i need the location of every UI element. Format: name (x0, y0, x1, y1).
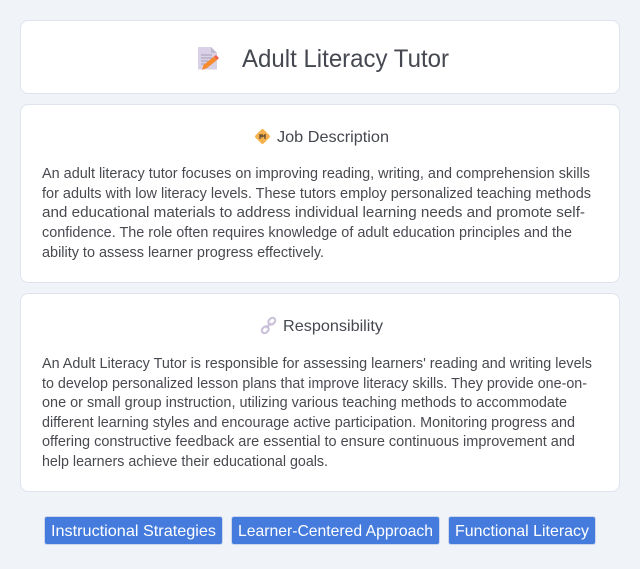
tag: learner-centered approach: Learner-Centered Approach (238, 523, 433, 540)
heading: responsibility: Responsibility (283, 318, 383, 335)
icon: document with pencil (198, 47, 219, 70)
panel: responsibility (20, 293, 620, 492)
heading: job description: Job Description (277, 129, 389, 146)
panel: job description (20, 104, 620, 283)
text: job description body: confidence. The role often requires knowledge of adult education principles and the (42, 225, 572, 241)
text: responsibility body: help learners achieve their educational goals. (42, 454, 328, 470)
text: responsibility body: different learning styles and encourage active participation. Monitoring progress and (42, 415, 575, 431)
text: responsibility body: offering constructive feedback are essential to ensure continuous improvement and (42, 434, 575, 450)
title: Adult Literacy Tutor (242, 45, 449, 73)
text: responsibility body: one or small group instruction, utilizing various teaching methods to accommodate (42, 395, 567, 411)
tag: functional literacy: Functional Literacy (455, 523, 589, 540)
icon: diamond sign (255, 129, 270, 144)
tag: functional literacy (448, 516, 596, 545)
tag: instructional strategies (44, 516, 223, 545)
text: job description body: and educational materials to address individual learning needs and promote self- (42, 205, 585, 221)
text: job description body: An adult literacy tutor focuses on improving reading, writing, and comprehension skills (42, 166, 590, 182)
panel: title (20, 20, 620, 94)
tag: learner-centered approach (231, 516, 440, 545)
text: responsibility body: An Adult Literacy Tutor is responsible for assessing learners' reading and writing levels (42, 356, 592, 372)
text: responsibility body: to develop personalized lesson plans that improve literacy skills. They provide one-on- (42, 376, 587, 392)
text: job description body: ability to assess learner progress effectively. (42, 245, 324, 261)
tag: instructional strategies: Instructional Strategies (51, 523, 216, 540)
text: job description body (42, 166, 591, 261)
text: job description body: for adults with low literacy levels. These tutors employ personalized teaching methods (42, 186, 591, 202)
icon: chain link (260, 316, 276, 334)
